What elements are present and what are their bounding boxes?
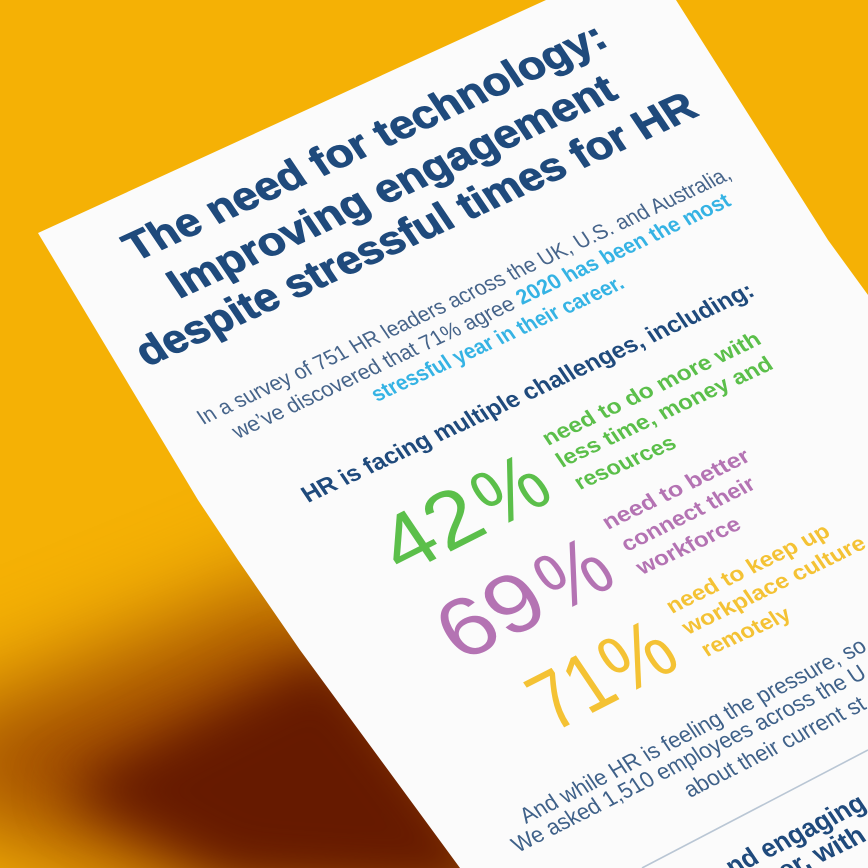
paper shadow	[0, 570, 520, 868]
stat: 69%	[417, 443, 760, 679]
stat: 71%: workplace culture	[676, 531, 868, 640]
stat: 42%: 42	[360, 468, 501, 591]
intro text: we’ve discovered that 71% agree	[226, 292, 520, 444]
stat: 42%	[360, 327, 777, 591]
stat: 42%: need to do more with	[537, 327, 765, 450]
intro text: In a survey of 751 HR leaders across the UK, U.S. and Australia,	[192, 162, 736, 429]
stat: 69%: %	[517, 519, 631, 629]
intro text: stressful year in their career.	[366, 271, 629, 406]
stat: 71%: %	[581, 602, 694, 712]
stat: 71%: need to keep up	[661, 519, 834, 618]
title: despite stressful times for HR	[126, 83, 705, 374]
divider	[642, 750, 868, 868]
stat: 42%: %	[454, 436, 567, 544]
stat: 42%: resources	[569, 430, 681, 494]
stat: 69%: need to better	[597, 443, 755, 534]
stat: 69%: connect their	[616, 471, 760, 556]
stat: 71%	[510, 519, 868, 749]
title: The need for technology:	[114, 13, 615, 269]
stat: 69%: 69	[417, 552, 564, 679]
stat: 69%: workforce	[630, 512, 745, 580]
subheading: HR is facing multiple challenges, including:	[296, 278, 759, 508]
stat: 71%: remotely	[696, 601, 796, 661]
stat: 42%: less time, money and	[551, 352, 777, 472]
title: Improving engagement	[158, 66, 625, 306]
intro text: 2020 has been the most	[511, 188, 736, 309]
stat: 71%: 71	[510, 634, 633, 749]
